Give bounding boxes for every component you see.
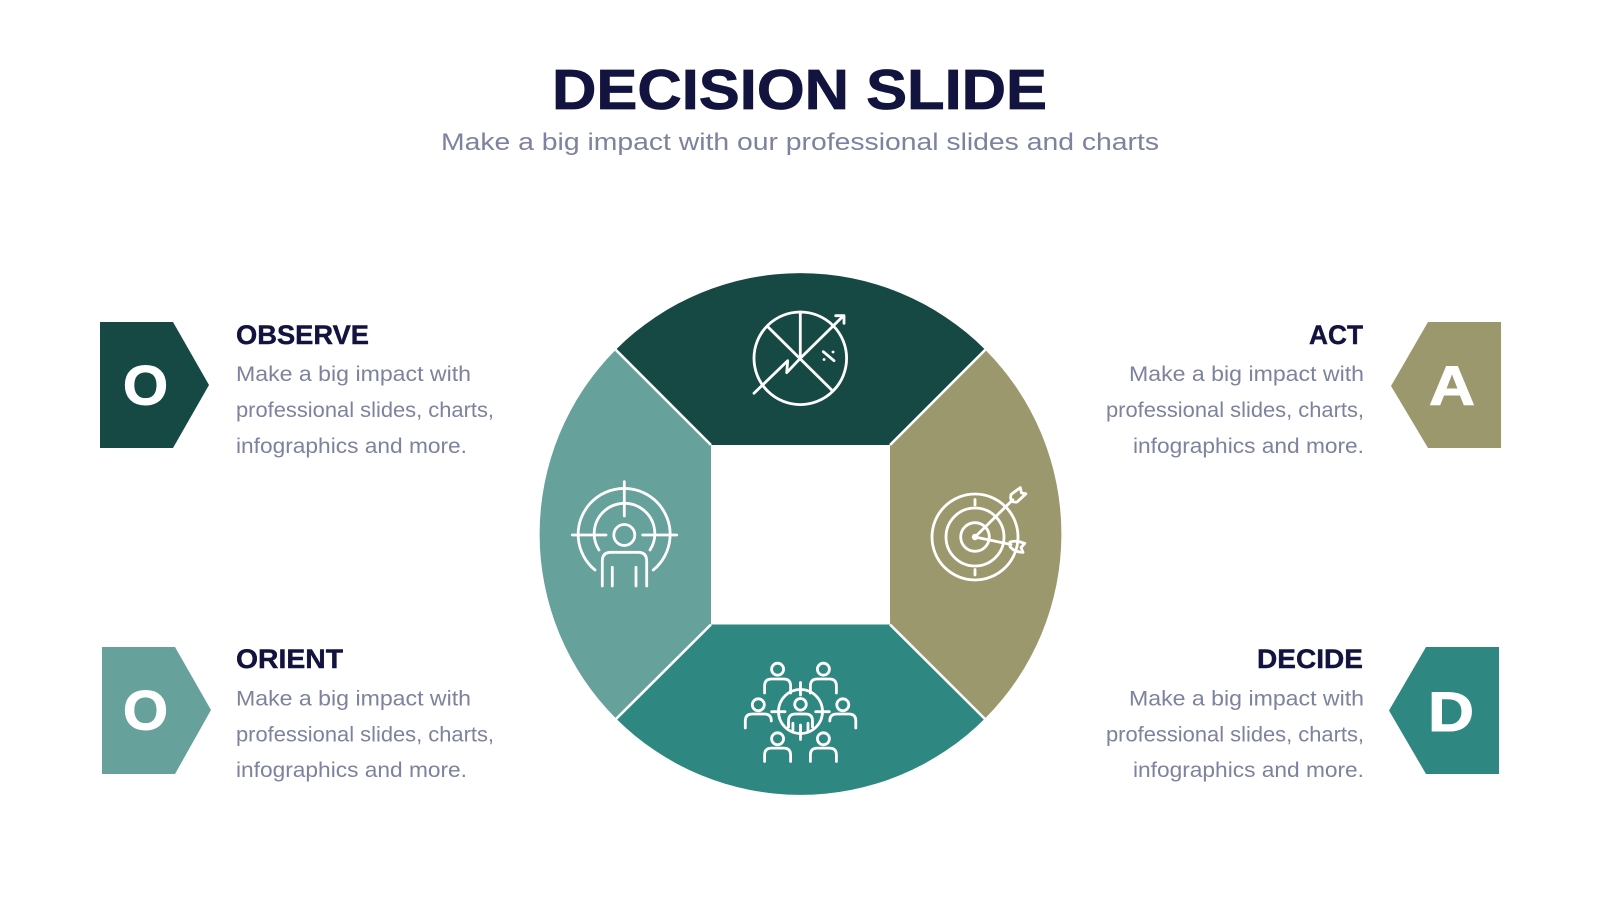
panel: decide: [1106, 644, 1499, 782]
badge: observe: O: [123, 354, 168, 416]
icon: group with target: [745, 663, 856, 762]
text: observe description: professional slides, charts,: [236, 399, 494, 422]
segment: bottom teal: [616, 624, 985, 795]
heading: orient: ORIENT: [236, 644, 343, 674]
badge: observe: [100, 322, 209, 448]
text: observe description: infographics and more.: [236, 435, 467, 458]
segment: top dark green: [616, 273, 985, 445]
text: act description: [1106, 363, 1364, 458]
badge: act: [1391, 322, 1501, 448]
icon: target with arrows: [932, 488, 1026, 580]
text: act description: professional slides, charts,: [1106, 399, 1364, 422]
panel: orient: [102, 644, 494, 782]
badge: decide: D: [1428, 680, 1474, 743]
text: decide description: Make a big impact with: [1129, 688, 1364, 710]
text: observe description: [236, 363, 494, 458]
title: DECISION SLIDE: [552, 58, 1047, 122]
text: decide description: professional slides, charts,: [1106, 724, 1364, 746]
badge: orient: [102, 647, 211, 774]
text: decide description: [1106, 688, 1364, 782]
text: act description: infographics and more.: [1133, 435, 1364, 458]
panel: observe: [100, 320, 494, 458]
segment: right olive: [890, 350, 1061, 718]
text: orient description: Make a big impact with: [236, 688, 471, 710]
heading: decide: DECIDE: [1257, 644, 1363, 674]
heading: act: ACT: [1309, 320, 1363, 350]
text: orient description: professional slides, charts,: [236, 724, 494, 746]
heading: observe: OBSERVE: [236, 320, 369, 350]
text: observe description: Make a big impact with: [236, 363, 471, 386]
chart: OODA wheel: [540, 273, 1061, 795]
text: orient description: [236, 688, 494, 782]
subtitle: Make a big impact with our professional slides and charts: [441, 129, 1159, 156]
badge: decide: [1389, 647, 1499, 774]
text: decide description: infographics and more.: [1133, 759, 1364, 782]
icon: pie chart with growth arrow: [754, 312, 847, 405]
badge: act: A: [1429, 354, 1475, 417]
panel: act: [1106, 320, 1501, 458]
text: orient description: infographics and more.: [236, 759, 467, 782]
badge: orient: O: [123, 678, 168, 742]
text: act description: Make a big impact with: [1129, 363, 1364, 386]
icon: person in crosshair: [572, 482, 677, 586]
segment: left light teal: [540, 350, 711, 718]
